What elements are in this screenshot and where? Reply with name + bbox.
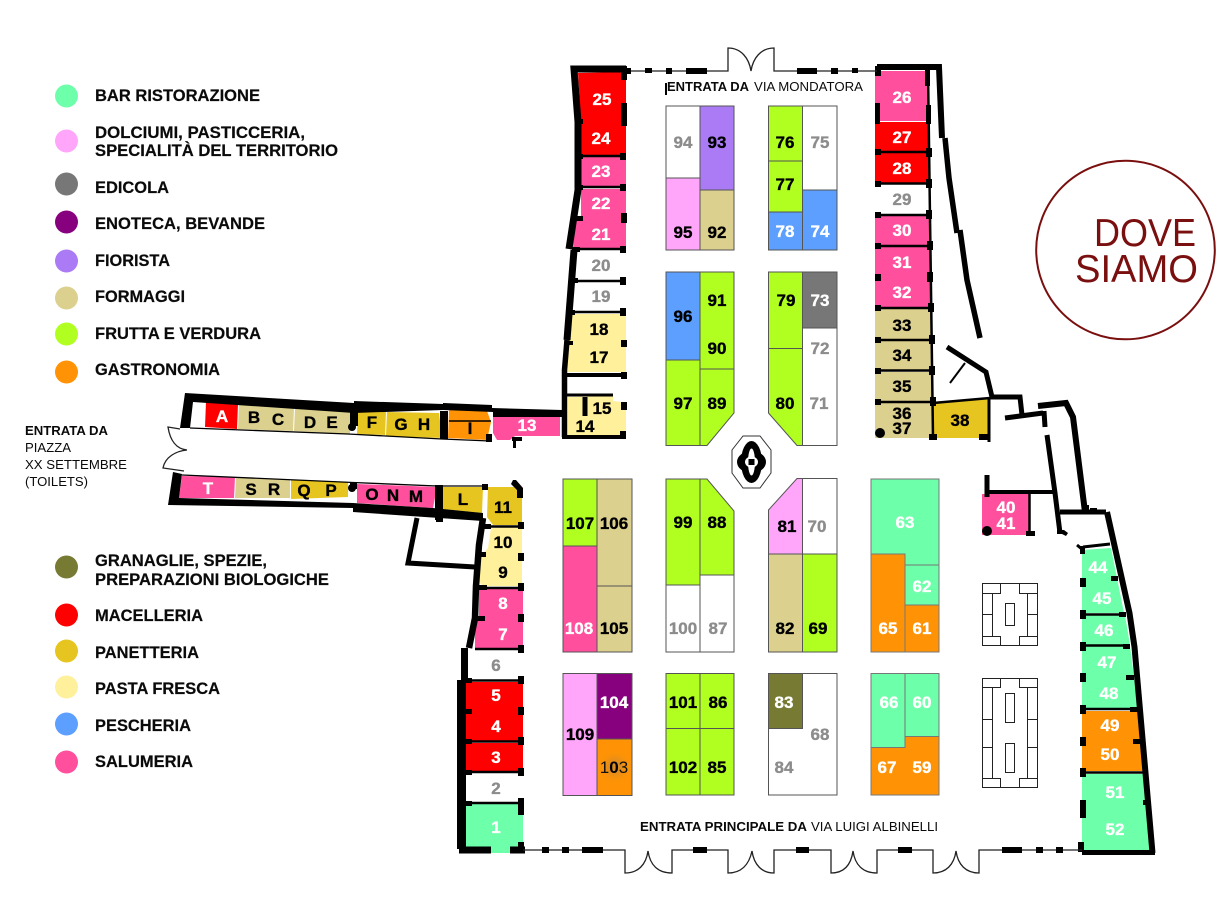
stalls S R: S (245, 480, 257, 499)
stall 29: 29 (893, 190, 911, 209)
stalls 72 71 (802, 328, 837, 446)
legend item: panetteria (55, 640, 199, 662)
legend: market categories (55, 84, 338, 774)
stall F: F (367, 413, 377, 432)
stall 22: 22 (592, 194, 610, 213)
stall 73 (802, 272, 837, 328)
stall 89: 89 (708, 394, 726, 413)
legend item: gastronomia (55, 360, 220, 384)
stall I (448, 410, 491, 440)
stall 74: 74 (811, 222, 830, 241)
legend item: formaggi (55, 286, 185, 310)
stall 105 (597, 586, 632, 652)
label: entrata via mondatora: VIA MONDATORA (754, 79, 863, 94)
legend item: salumeria: SALUMERIA (95, 753, 193, 771)
stalls 84 68: 68 (811, 725, 829, 744)
stall 107 (563, 479, 597, 546)
stall 35: 35 (893, 377, 911, 396)
label: entrata principale via luigi albinelli: VIA LUIGI ALBINELLI (811, 819, 938, 834)
stall 83: 83 (775, 693, 793, 712)
stall A: A (216, 407, 228, 426)
label: entrata piazza xx settembre: ENTRATA DA (25, 423, 109, 438)
stalls 84 68 (768, 674, 837, 795)
badge: dove siamo: SIAMO (1075, 248, 1198, 291)
stalls D E (294, 408, 350, 434)
stalls 72 71: 71 (810, 394, 828, 413)
legend item: dolciumi: DOLCIUMI, PASTICCERIA, (95, 124, 305, 142)
top facade with door (626, 48, 877, 95)
stalls 15 14: 15 (593, 399, 611, 418)
stall 20: 20 (592, 256, 610, 275)
legend item: dolciumi (55, 124, 338, 160)
stall 31 (875, 247, 930, 277)
stall 21 (573, 218, 626, 249)
stall 48 (1082, 678, 1139, 708)
stall 93 (700, 106, 734, 190)
stall 70 (802, 478, 837, 554)
block 84 68 83 (768, 674, 837, 795)
stall 69 (802, 554, 837, 652)
stall 34 (875, 341, 931, 370)
stall 92 (700, 190, 734, 250)
block 94 93 95 92 (666, 106, 734, 250)
stall 47: 47 (1098, 653, 1116, 672)
legend item: pescheria (55, 712, 191, 736)
stall 96: 96 (674, 307, 692, 326)
stall 100 (666, 585, 700, 652)
stalls 18 17: 17 (590, 348, 608, 367)
legend item: enoteca (55, 210, 265, 234)
stall 13 (493, 416, 560, 440)
stall 28: 28 (893, 159, 911, 178)
label: entrata principale via luigi albinelli: ENTRATA PRINCIPALE DA (640, 819, 808, 834)
stalls 91 90 (700, 272, 734, 369)
stall 100: 100 (669, 619, 697, 638)
stalls Q P: P (325, 481, 337, 500)
stall 73: 73 (811, 291, 829, 310)
bottom facade with four doors (523, 847, 1082, 873)
stall 45: 45 (1093, 589, 1111, 608)
stall 95: 95 (674, 223, 692, 242)
legend item: pasta fresca (55, 676, 220, 698)
stall 7: 7 (498, 625, 508, 644)
stalls B C: C (272, 410, 284, 429)
stall 8 (479, 589, 523, 619)
stall 50 (1082, 741, 1143, 771)
stall 65 (871, 554, 905, 652)
legend item: edicola: EDICOLA (95, 179, 169, 197)
stall 45 (1082, 578, 1124, 613)
stall 106 (597, 479, 632, 586)
stall T (179, 476, 235, 498)
stalls O N M: O (365, 485, 379, 504)
stalls 67 59: 67 (878, 758, 896, 777)
legend item: salumeria (55, 750, 193, 774)
stall 4 (466, 711, 523, 741)
stall 105: 105 (600, 619, 628, 638)
left column stalls upper (493, 72, 626, 440)
stall 13: 13 (518, 416, 536, 435)
stall 1 (466, 804, 523, 853)
badge: dove siamo (1036, 161, 1215, 339)
legend item: panetteria: PANETTERIA (95, 644, 199, 662)
stalls O N M: N (387, 486, 399, 505)
legend item: dolciumi: SPECIALITÀ DEL TERRITORIO (95, 141, 338, 160)
stall 49 (1082, 711, 1140, 741)
stall 70: 70 (808, 517, 826, 536)
stalls D E: E (326, 413, 338, 432)
stall 32 (875, 277, 930, 307)
stall 46: 46 (1095, 621, 1113, 640)
stall 51: 51 (1106, 783, 1124, 802)
stalls Q P (291, 480, 348, 500)
stall 34: 34 (893, 346, 912, 365)
stalls 15 14: 14 (576, 417, 595, 436)
stall 24: 24 (592, 129, 611, 148)
building walls (168, 67, 1155, 853)
block 66 60 67 59 (871, 674, 939, 795)
stall 76: 76 (776, 133, 794, 152)
block 79 80 73 72 71 (768, 272, 837, 446)
stall 25 (578, 72, 626, 122)
stall 27: 27 (893, 128, 911, 147)
stall 63: 63 (896, 513, 914, 532)
stall 28 (875, 153, 929, 183)
label: entrata piazza xx settembre: PIAZZA (25, 440, 71, 455)
stalls O N M (357, 484, 437, 508)
legend item: fiorista (55, 250, 170, 272)
stall 52: 52 (1106, 820, 1124, 839)
stall 22 (581, 189, 626, 218)
label: entrata via mondatora (667, 79, 863, 94)
stall 74 (802, 190, 837, 250)
stalls Q P: Q (297, 481, 311, 500)
stall 94: 94 (674, 133, 693, 152)
block 99 88 100 87 (666, 479, 734, 652)
block 63 62 65 61 (871, 479, 939, 652)
stalls G H: G (394, 415, 408, 434)
label: entrata piazza xx settembre: (TOILETS) (25, 474, 88, 489)
stalls G H (386, 412, 442, 438)
legend item: formaggi: FORMAGGI (95, 288, 185, 306)
stall 25: 25 (593, 90, 611, 109)
stalls G H: H (418, 415, 430, 434)
stall 4: 4 (491, 717, 501, 736)
stall 107: 107 (566, 514, 594, 533)
stalls 36 37: 37 (893, 419, 911, 438)
stall 21: 21 (592, 225, 610, 244)
stall 63 (871, 479, 939, 565)
stall 44 (1082, 548, 1117, 578)
stall 61 (905, 605, 939, 652)
legend item: enoteca: ENOTECA, BEVANDE (95, 215, 265, 233)
structure: stage outline upper (982, 584, 1038, 646)
stall 44: 44 (1089, 558, 1108, 577)
stalls 84 68: 84 (775, 758, 794, 777)
stall 108: 108 (565, 619, 593, 638)
stall 33: 33 (893, 316, 911, 335)
legend item: macelleria: MACELLERIA (95, 607, 203, 625)
block 101 86 102 85 (666, 674, 734, 795)
stall 66: 66 (880, 693, 898, 712)
stall 96 (666, 272, 700, 360)
stall L: L (458, 490, 468, 509)
floor plan (163, 48, 1155, 873)
pillars (348, 66, 1149, 852)
stall 50: 50 (1101, 745, 1119, 764)
stall 6: 6 (491, 656, 501, 675)
emblem: central fountain (732, 436, 771, 488)
stall 85: 85 (708, 758, 726, 777)
legend item: pasta fresca: PASTA FRESCA (95, 680, 220, 698)
stall 30: 30 (893, 221, 911, 240)
stall 95 (666, 178, 700, 250)
legend item: frutta e verdura: FRUTTA E VERDURA (95, 325, 261, 343)
stall 11: 11 (494, 498, 512, 517)
stall 81 (768, 478, 802, 554)
stall F (357, 410, 386, 435)
legend item: macelleria (55, 604, 203, 626)
stalls 36 37 (875, 403, 932, 438)
stalls 40 41: 40 (997, 498, 1015, 517)
stall A (205, 402, 238, 429)
stall 11 (487, 487, 522, 525)
stall 1: 1 (491, 818, 501, 837)
stall 5 (466, 682, 523, 711)
stall 30 (875, 216, 929, 245)
stalls 36 37: 36 (893, 404, 911, 423)
stalls 10 9: 9 (498, 563, 508, 582)
stall 62 (905, 565, 939, 605)
stall 109: 109 (566, 725, 594, 744)
block 81 70 82 69 (768, 478, 837, 652)
stall 106: 106 (600, 514, 628, 533)
upper corridor stalls (205, 402, 491, 440)
stalls 18 17 (567, 314, 626, 372)
stall 26 (875, 71, 928, 121)
stall 77 (768, 161, 802, 212)
lower corridor stalls (179, 476, 522, 525)
stalls 72 71: 72 (811, 339, 829, 358)
stall 75 (802, 106, 837, 190)
label: entrata via mondatora: ENTRATA DA (667, 79, 750, 94)
stalls 10 9 (479, 527, 522, 586)
label: entrata piazza xx settembre (25, 423, 127, 489)
stall 104: 104 (600, 693, 629, 712)
stall 108 (563, 546, 597, 652)
stall 32: 32 (893, 283, 911, 302)
stall 62: 62 (913, 577, 931, 596)
stalls 15 14 (568, 396, 626, 436)
block 109 104 103 (563, 674, 632, 796)
stall 65: 65 (879, 619, 897, 638)
legend item: fiorista: FIORISTA (95, 252, 170, 270)
stall 35 (875, 372, 932, 402)
stalls 40 41 (982, 494, 1029, 535)
stall 26: 26 (893, 88, 911, 107)
stalls 10 9: 10 (494, 533, 512, 552)
stall 102: 102 (669, 758, 697, 777)
legend item: granaglie (55, 552, 329, 589)
badge: dove siamo: DOVE (1094, 212, 1196, 255)
stall 77: 77 (776, 175, 794, 194)
stalls O N M: M (409, 487, 423, 506)
stalls B C: B (248, 408, 260, 427)
stall 48: 48 (1100, 684, 1118, 703)
stall T: T (203, 479, 214, 498)
stall 86: 86 (709, 693, 727, 712)
stalls S R (235, 478, 290, 499)
stall 78 (768, 212, 802, 250)
stall 49: 49 (1101, 716, 1119, 735)
stalls 91 90: 91 (708, 291, 726, 310)
stall 80 (768, 348, 802, 446)
stall 92: 92 (708, 223, 726, 242)
stall 88 (700, 479, 734, 575)
stall 99: 99 (674, 513, 692, 532)
legend item: granaglie: PREPARAZIONI BIOLOGICHE (95, 571, 329, 589)
stall 93: 93 (708, 133, 726, 152)
stall 23 (581, 157, 626, 186)
stall 94 (666, 106, 700, 178)
stall 3 (466, 743, 523, 771)
stall 75: 75 (811, 133, 829, 152)
stall 81: 81 (778, 517, 796, 536)
stall 79: 79 (777, 291, 795, 310)
stalls 67 59 (871, 736, 939, 795)
stalls 40 41: 41 (997, 514, 1015, 533)
stall 99 (666, 479, 700, 585)
stall 82 (768, 554, 802, 652)
stalls 91 90: 90 (708, 339, 726, 358)
stall 38 (933, 399, 988, 438)
right column stalls bottom (1082, 548, 1151, 851)
stall 46 (1082, 615, 1130, 645)
stall 82: 82 (776, 619, 794, 638)
stall 87 (700, 575, 734, 652)
stalls S R: R (268, 480, 280, 499)
stall 8: 8 (498, 594, 508, 613)
block 76 75 78 74 (768, 106, 837, 250)
stall 89 (700, 369, 734, 446)
stall I: I (468, 419, 472, 438)
stall 60: 60 (913, 693, 931, 712)
stall 2: 2 (491, 779, 501, 798)
legend item: bar ristorazione: BAR RISTORAZIONE (95, 87, 260, 105)
stalls 18 17: 18 (590, 320, 608, 339)
block 107 106 108 105 (563, 479, 632, 652)
stall 7 (475, 619, 523, 648)
stall 61: 61 (913, 619, 931, 638)
stall 33 (875, 309, 931, 340)
stalls 67 59: 59 (913, 758, 931, 777)
stall 87: 87 (709, 619, 727, 638)
stall 24 (581, 122, 626, 155)
left entrance doors (163, 427, 187, 471)
stall 47 (1082, 646, 1134, 678)
stall L (442, 487, 483, 513)
right column stalls top (875, 71, 1029, 535)
stall 88: 88 (708, 513, 726, 532)
stall 80: 80 (776, 394, 794, 413)
block 96 97 91 90 89 (666, 272, 734, 446)
stall 38: 38 (951, 411, 969, 430)
stall 23: 23 (592, 162, 610, 181)
stall 27 (875, 122, 928, 152)
legend item: edicola (55, 172, 169, 197)
label: entrata piazza xx settembre: XX SETTEMBRE (25, 457, 127, 472)
legend item: pescheria: PESCHERIA (95, 717, 191, 735)
stall 51 (1082, 774, 1149, 813)
stall 31: 31 (893, 253, 911, 272)
legend item: gastronomia: GASTRONOMIA (95, 361, 220, 379)
stall 97 (666, 360, 700, 446)
stalls D E: D (304, 413, 316, 432)
stalls B C (238, 404, 294, 431)
stall 97: 97 (674, 394, 692, 413)
stall 3: 3 (491, 748, 501, 767)
stall 69: 69 (809, 619, 827, 638)
stall 5: 5 (491, 686, 501, 705)
stall 103: 103 (600, 758, 628, 777)
stall 78: 78 (776, 222, 794, 241)
legend item: frutta e verdura (55, 322, 261, 346)
structure: stage outline lower (982, 678, 1038, 788)
stall 79 (768, 272, 802, 348)
legend item: bar ristorazione (55, 84, 260, 108)
stall 101: 101 (669, 693, 697, 712)
stall 19: 19 (592, 287, 610, 306)
label: entrata principale via luigi albinelli (640, 819, 938, 834)
stall 52 (1082, 813, 1151, 851)
stall 76 (768, 106, 802, 161)
legend item: granaglie: GRANAGLIE, SPEZIE, (95, 552, 267, 570)
left column stalls lower (466, 527, 523, 853)
